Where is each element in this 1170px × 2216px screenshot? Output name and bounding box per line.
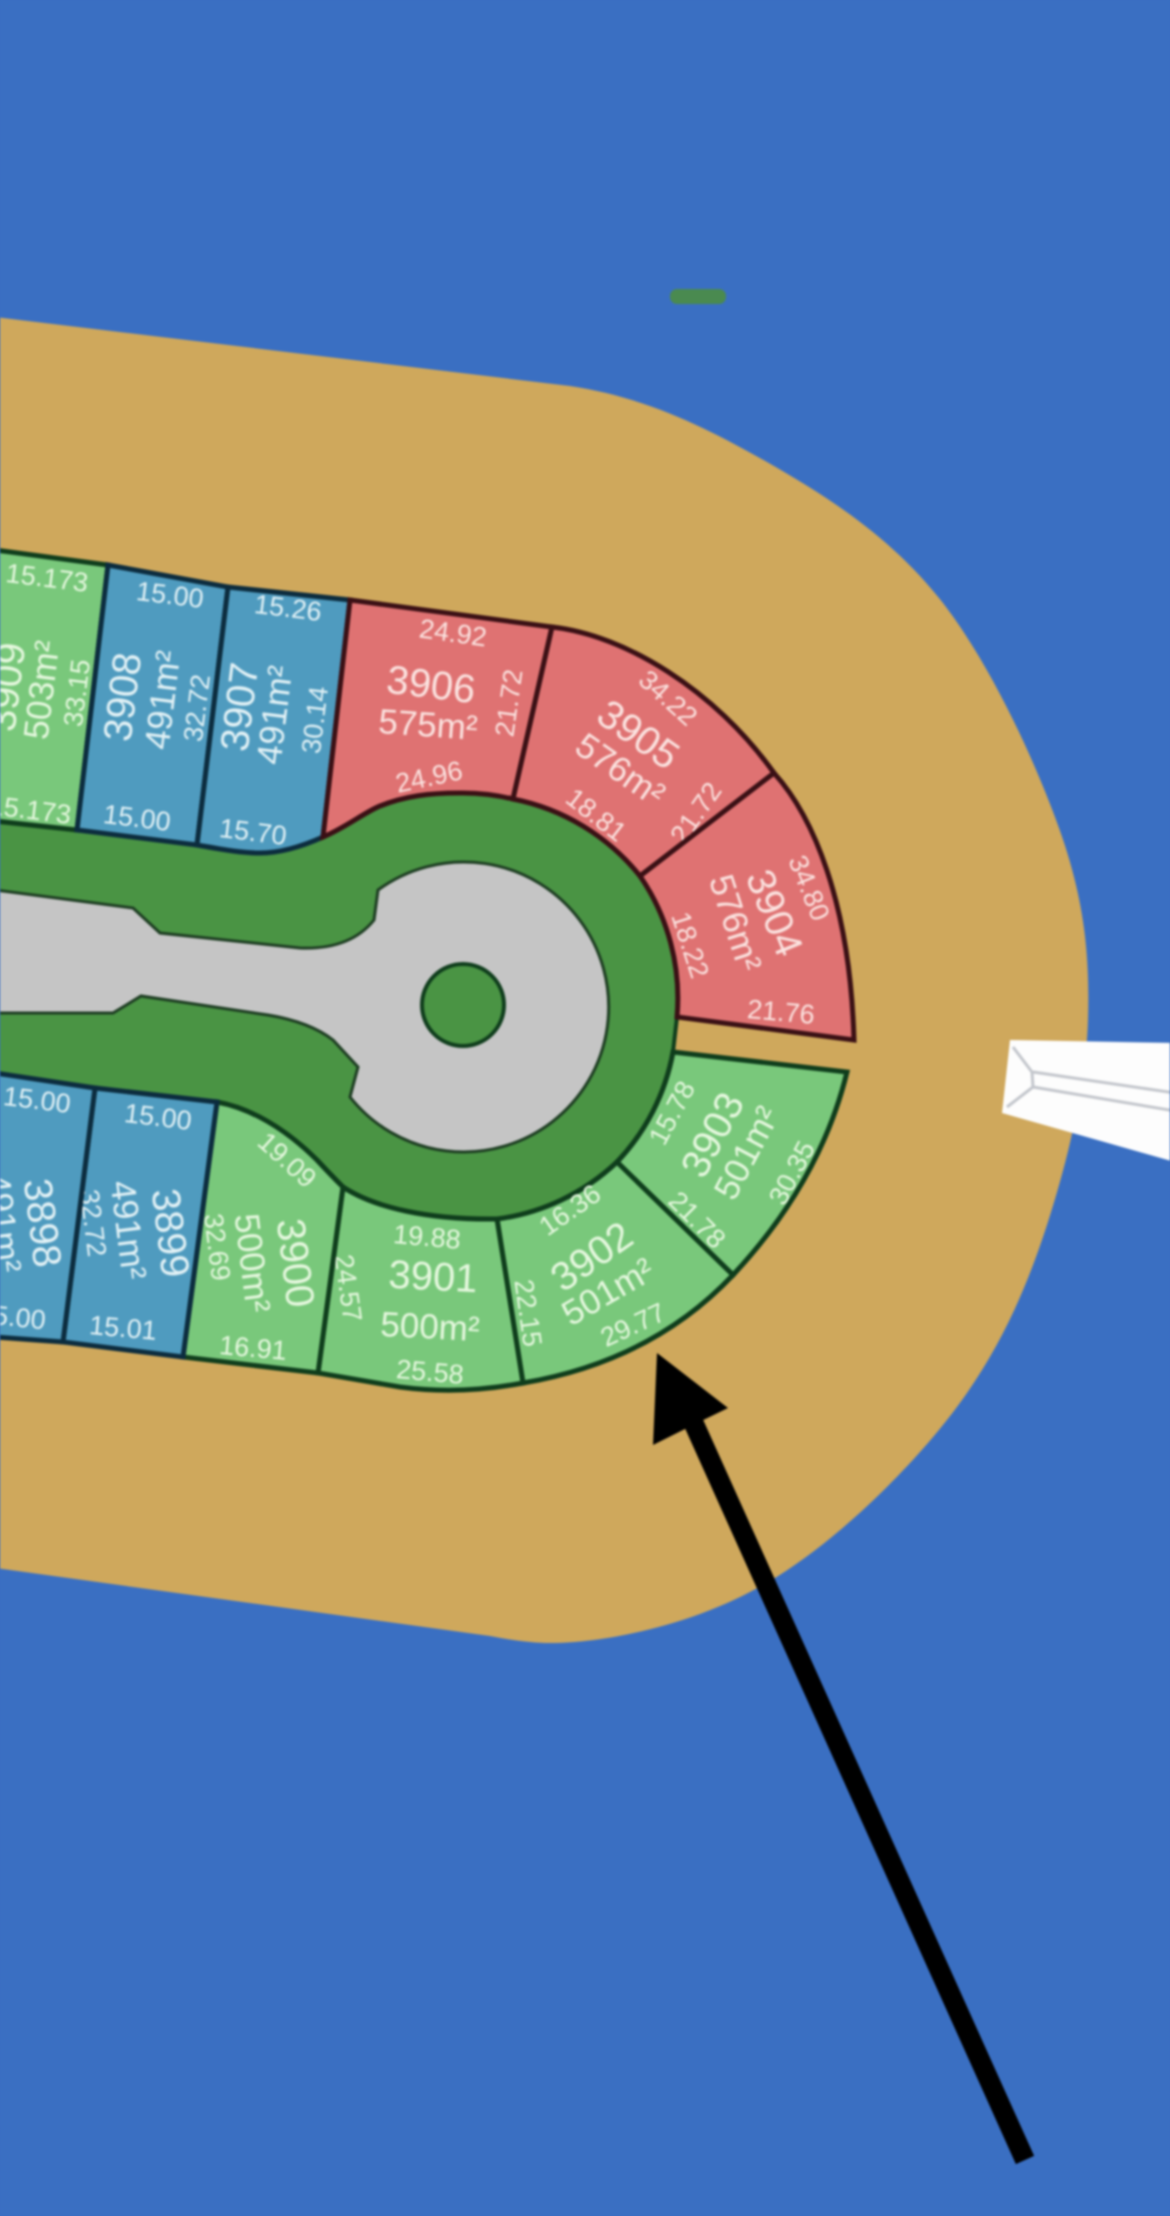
lot 3900: 3900	[268, 1216, 322, 1310]
lot 3901: 3901	[387, 1253, 479, 1301]
lot 3898: 3898	[15, 1176, 69, 1270]
lot 3902: 22.15	[508, 1277, 548, 1349]
lot 3902	[497, 1162, 733, 1383]
lot 3905: 3905	[589, 691, 687, 779]
central roundabout island	[422, 964, 504, 1046]
lot 3906	[323, 600, 552, 837]
lot 3902: 16.36	[534, 1178, 606, 1242]
lot 3902: 29.77	[596, 1297, 670, 1353]
lot 3904: 18.22	[665, 908, 715, 982]
lot 3907: 491m²	[250, 663, 300, 767]
lot 3907: 15.70	[218, 813, 288, 851]
lot 3906: 575m²	[377, 702, 479, 748]
lot 3899: 32.72	[74, 1188, 112, 1258]
lot 3899: 15.00	[123, 1098, 193, 1136]
lot 3900	[183, 1102, 343, 1373]
lot 3906: 24.92	[417, 613, 489, 653]
lot 3907: 30.14	[296, 685, 334, 755]
lot 3901: 19.88	[392, 1219, 462, 1255]
lot 3905: 18.81	[560, 782, 632, 848]
lot 3906: 24.96	[393, 755, 465, 799]
black arrow pointing to lot 3902	[653, 1353, 1025, 2160]
lot 3901: 500m²	[379, 1305, 481, 1349]
lot 3903: 3903	[673, 1085, 753, 1185]
lot 3904: 3904	[737, 864, 811, 962]
lot 3908: 15.00	[102, 799, 172, 837]
lot 3905: 34.22	[633, 664, 703, 732]
lot 3898	[0, 1073, 95, 1342]
lot 3902: 3902	[543, 1213, 641, 1301]
lot 3901	[318, 1187, 523, 1390]
lot 3908: 15.00	[135, 576, 205, 614]
lot 3909: 15.173	[4, 558, 90, 598]
lot 3909: 33.15	[58, 658, 96, 728]
lot 3903: 501m²	[706, 1100, 788, 1206]
lot 3900: 16.91	[218, 1330, 288, 1366]
lot 3904: 34.80	[782, 851, 836, 925]
lot 3902: 501m²	[555, 1250, 661, 1334]
lot 3908: 491m²	[138, 648, 188, 752]
lot 3903	[617, 1052, 847, 1275]
lot 3905	[513, 627, 774, 876]
lot 3901: 25.58	[395, 1354, 465, 1390]
lot 3906: 21.72	[489, 667, 529, 739]
lot 3904: 576m²	[701, 870, 769, 976]
lot 3909: 503m²	[17, 638, 67, 742]
lot 3905: 21.72	[664, 777, 728, 849]
lot 3900: 19.09	[252, 1126, 322, 1194]
lot 3908: 32.72	[178, 673, 216, 743]
lot 3908	[77, 565, 228, 845]
small green marker	[670, 289, 726, 304]
lot 3908: 3908	[96, 650, 150, 744]
lot 3904: 21.76	[746, 994, 816, 1030]
lot 3899: 491m²	[103, 1178, 153, 1282]
white jetty	[1002, 1040, 1170, 1162]
lot 3904	[640, 773, 854, 1040]
lot 3905: 576m²	[568, 726, 672, 814]
sand island	[0, 317, 1088, 1643]
lot 3906: 3906	[384, 658, 478, 712]
lot 3901: 24.57	[328, 1252, 368, 1324]
lot 3907: 15.26	[253, 589, 323, 627]
lot 3899	[63, 1088, 217, 1357]
lot 3903: 30.35	[763, 1136, 821, 1210]
lot 3907	[197, 587, 350, 853]
lot 3900: 32.69	[198, 1212, 236, 1282]
green boulevard and cul-de-sac ring	[0, 793, 678, 1219]
lot 3903: 15.78	[643, 1076, 701, 1150]
grey road	[0, 862, 609, 1152]
lot 3899: 3899	[143, 1186, 197, 1280]
lot 3900: 500m²	[227, 1211, 277, 1315]
lot 3907: 3907	[213, 660, 267, 754]
lot 3899: 15.01	[88, 1310, 158, 1346]
lot 3909	[0, 550, 108, 830]
lot 3898: 15.00	[2, 1081, 72, 1119]
lot 3903: 21.78	[663, 1186, 731, 1254]
